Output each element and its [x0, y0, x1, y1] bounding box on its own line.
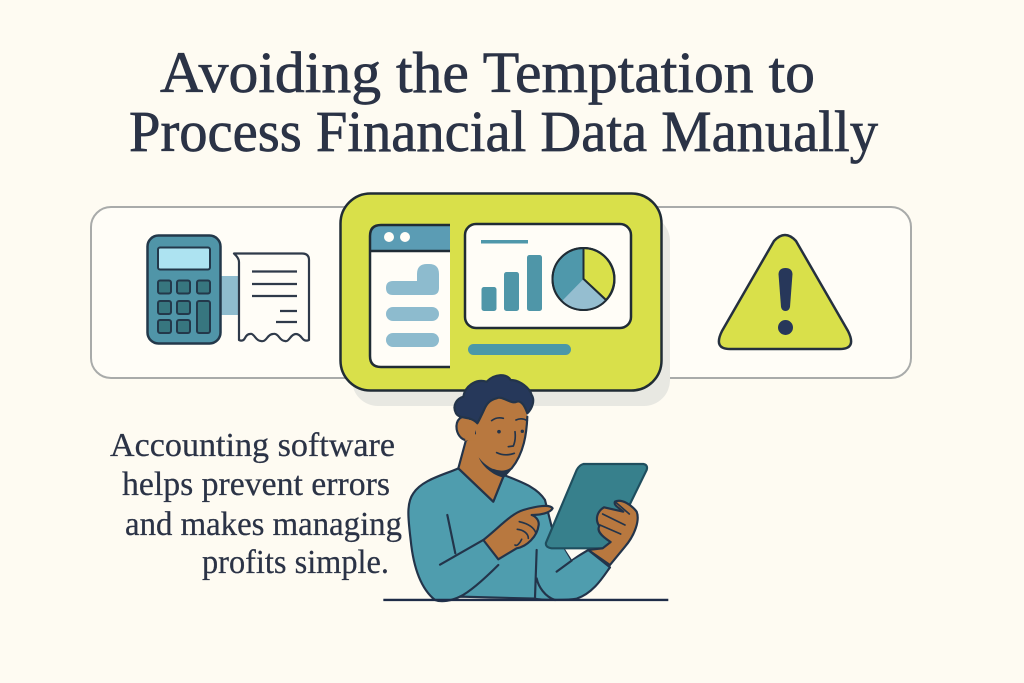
- caption text: [110, 427, 402, 581]
- title: Process Financial Data Manually: [129, 99, 878, 164]
- tablet: [546, 464, 647, 548]
- panel: lime board: [340, 194, 662, 390]
- icon: warning triangle: [719, 235, 851, 349]
- panel: background strip: [91, 207, 911, 378]
- icon: calculator and receipt: [148, 236, 309, 344]
- panel: software dashboard: [340, 194, 670, 406]
- jaw shadow: [479, 457, 512, 478]
- right hand: [588, 501, 638, 565]
- pointing hand: [483, 506, 553, 559]
- sweater seams: [440, 515, 572, 600]
- title: [129, 40, 878, 164]
- desk line: [383, 596, 668, 603]
- gap between arm and tablet: [565, 549, 585, 559]
- panel shadow: [352, 215, 670, 406]
- progress bar: [468, 344, 571, 355]
- icon: calculator: [148, 236, 220, 344]
- neck outline: [458, 417, 527, 502]
- neck and face skin: [458, 395, 527, 502]
- sweater: [408, 468, 610, 601]
- bar chart: [482, 255, 542, 311]
- pie chart: [552, 248, 614, 310]
- connector strip: [221, 276, 241, 315]
- chart card: [465, 224, 631, 328]
- ear: [456, 417, 475, 440]
- caption text: profits simple.: [202, 544, 389, 581]
- icon: receipt: [234, 254, 309, 341]
- sidebar window: [370, 225, 450, 367]
- caption text: helps prevent errors: [122, 466, 390, 503]
- title: Avoiding the Temptation to: [160, 40, 815, 105]
- face details: [492, 418, 527, 455]
- person with tablet: [383, 375, 668, 601]
- caption text: Accounting software: [110, 427, 395, 464]
- caption text: and makes managing: [125, 506, 402, 543]
- hair: [454, 375, 533, 423]
